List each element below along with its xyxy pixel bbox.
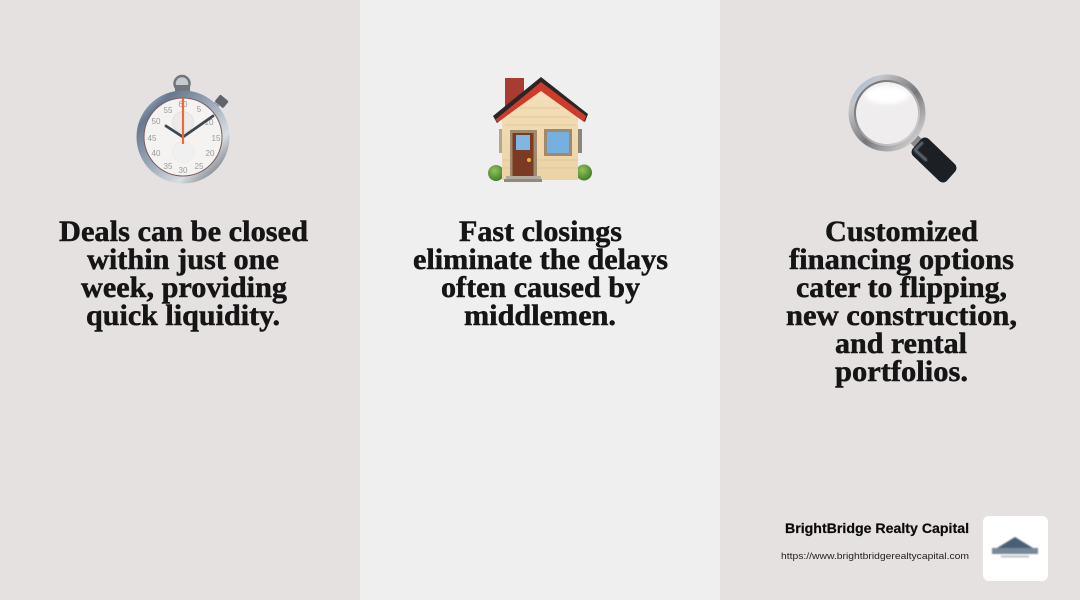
heading: financing options: cater to flipping, (796, 271, 1007, 304)
icon: stopwatch: 50 (152, 117, 161, 126)
icon: stopwatch: 25 (195, 162, 204, 171)
icon: stopwatch: 45 (148, 134, 157, 143)
brand name: BrightBridge Realty Capital (785, 521, 969, 536)
icon: stopwatch: 15 (212, 134, 221, 143)
heading: deals closed: quick liquidity. (86, 299, 280, 332)
heading: deals closed (59, 215, 308, 332)
icon: magnifying glass (848, 74, 951, 177)
panel: fast deals (0, 0, 360, 600)
heading: financing options: and rental (835, 327, 967, 360)
icon: house (488, 77, 592, 182)
heading: deals closed: within just one (87, 243, 279, 276)
heading: financing options (786, 215, 1017, 388)
icon: stopwatch: 35 (164, 162, 173, 171)
heading: deals closed: week, providing (81, 271, 287, 304)
heading: fast closings: often caused by (441, 271, 640, 304)
panel: fast closings (360, 0, 720, 600)
icon: stopwatch: 20 (206, 149, 215, 158)
icon: stopwatch: 55 (164, 106, 173, 115)
icon: stopwatch: 40 (152, 149, 161, 158)
heading: fast closings: middlemen. (464, 299, 616, 332)
heading: fast closings: Fast closings (459, 215, 622, 248)
icon: stopwatch: 30 (179, 166, 188, 175)
heading: deals closed: Deals can be closed (59, 215, 308, 248)
icon: stopwatch: 10 (205, 118, 214, 127)
icon: stopwatch: 60 (179, 100, 188, 109)
heading: financing options: new construction, (786, 299, 1017, 332)
icon: stopwatch (136, 76, 230, 184)
heading: financing options: financing options (789, 243, 1014, 276)
icon: stopwatch: 5 (197, 105, 202, 114)
website url: https://www.brightbridgerealtycapital.com (781, 551, 969, 562)
heading: financing options: Customized (825, 215, 978, 248)
heading: fast closings (413, 215, 668, 332)
heading: fast closings: eliminate the delays (413, 243, 668, 276)
heading: financing options: portfolios. (835, 355, 968, 388)
panel: customized financing (720, 0, 1080, 600)
logo (983, 516, 1048, 581)
